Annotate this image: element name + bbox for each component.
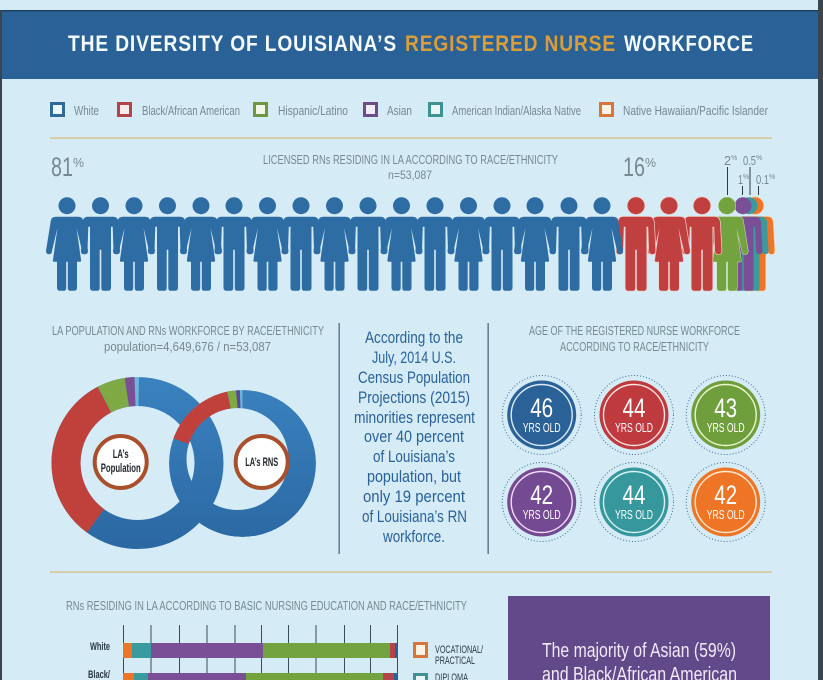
stat: 81 percent: 81 (51, 152, 73, 182)
text block: census statement: July, 2014 U.S. (372, 349, 456, 367)
heading: licensed RNs: LICENSED RNs RESIDING IN LA ACCORDING TO RACE/ETHNICITY (263, 153, 558, 167)
badge: LA's RNs: LA’s RNS (245, 455, 278, 469)
age badge: Asian 42: YRS OLD (523, 508, 561, 522)
age badge: Asian 42 (502, 462, 581, 542)
chart: interlocked donuts (52, 377, 316, 549)
badge: LA's population: LA’s (113, 447, 129, 461)
badge: LA's RNs (236, 436, 288, 488)
callout: Asian and Black nurses: The majority of Asian (59%) (542, 640, 736, 662)
stat: 81 percent: % (73, 155, 84, 170)
legend: race/ethnicity: Hispanic/Latino (278, 103, 348, 118)
legend: race/ethnicity: Native Hawaiian/Pacific Islander (623, 103, 769, 118)
age badge: Hispanic 43: 43 (714, 393, 737, 423)
age badge: Asian 42: 42 (530, 480, 553, 510)
legend: race/ethnicity (52, 103, 769, 118)
text block: census statement: Census Population (358, 369, 470, 387)
title banner: REGISTERED NURSE (405, 31, 616, 56)
text block: census statement: only 19 percent (363, 488, 465, 506)
title banner: THE DIVERSITY OF LOUISIANA’S (68, 31, 397, 56)
age badge: White 46: 46 (530, 393, 553, 423)
small percentage callouts: 1 (738, 172, 743, 187)
age badge: White 46 (502, 376, 581, 454)
small percentage callouts: 0.5 (743, 153, 756, 168)
text block: census statement: of Louisiana’s RN (362, 508, 467, 526)
heading: population and RN workforce: population=4,649,676 / n=53,087 (104, 340, 271, 354)
text block: census statement: population, but (367, 468, 461, 486)
text block: census statement: According to the (365, 329, 463, 347)
legend: race/ethnicity: Black/African American (142, 103, 240, 118)
title banner (2, 10, 818, 79)
age badge: Hispanic 43 (686, 376, 765, 454)
callout: Asian and Black nurses (508, 596, 770, 680)
age badge: American Indian 44: 44 (622, 480, 646, 510)
small percentage callouts (724, 153, 775, 195)
legend: education type: VOCATIONAL/ (435, 644, 484, 656)
small percentage callouts: 0.1 (756, 172, 769, 187)
heading: population and RN workforce (52, 324, 324, 354)
badge: LA's population: Population (101, 461, 141, 475)
age badge: Hispanic 43: YRS OLD (707, 421, 745, 435)
heading: basic nursing education: RNs RESIDING IN LA ACCORDING TO BASIC NURSING EDUCATION AND RACE/ETHNICITY (66, 599, 467, 613)
age badge: Black 44: 44 (622, 393, 646, 423)
age badge: Black 44: YRS OLD (615, 421, 653, 435)
age badge: Native Hawaiian 42: 42 (714, 480, 737, 510)
text block: census statement: of Louisiana’s (373, 448, 455, 466)
age badge: American Indian 44 (594, 462, 674, 542)
heading: age of RN workforce: AGE OF THE REGISTERED NURSE WORKFORCE (529, 324, 740, 338)
legend: race/ethnicity: American Indian/Alaska Native (452, 103, 581, 118)
text block: census statement (354, 329, 475, 546)
legend: education type (414, 644, 484, 680)
text block: census statement: minorities represent (354, 409, 475, 427)
age badge: White 46: YRS OLD (523, 421, 561, 435)
stacked bar chart: education by race: White (90, 641, 110, 653)
text block: census statement: over 40 percent (364, 428, 464, 446)
age badge: American Indian 44: YRS OLD (615, 508, 653, 522)
small percentage callouts: % (756, 155, 762, 162)
small percentage callouts: 2 (724, 153, 731, 168)
small percentage callouts: % (769, 174, 775, 181)
legend: race/ethnicity: Asian (387, 103, 412, 118)
pictogram: people by race (46, 197, 774, 291)
small percentage callouts: % (743, 174, 749, 181)
small percentage callouts: % (731, 155, 737, 162)
stat: 16 percent: 16 (623, 152, 645, 182)
heading: population and RN workforce: LA POPULATION AND RNs WORKFORCE BY RACE/ETHNICITY (52, 324, 324, 338)
heading: licensed RNs (263, 153, 558, 182)
heading: age of RN workforce (529, 324, 740, 354)
age badge: Black 44 (594, 376, 674, 454)
heading: licensed RNs: n=53,087 (388, 168, 432, 182)
heading: age of RN workforce: ACCORDING TO RACE/ETHNICITY (560, 340, 709, 354)
legend: education type: PRACTICAL (435, 655, 475, 667)
age badge: Native Hawaiian 42: YRS OLD (707, 508, 745, 522)
age badge: Native Hawaiian 42 (686, 462, 765, 542)
stacked bar chart: education by race (88, 625, 398, 680)
text block: census statement: Projections (2015) (358, 389, 470, 407)
text block: census statement: workforce. (382, 528, 445, 546)
title banner: WORKFORCE (624, 31, 754, 56)
stat: 16 percent: % (645, 155, 656, 170)
badge: LA's population (95, 436, 147, 488)
legend: race/ethnicity: White (74, 103, 99, 118)
